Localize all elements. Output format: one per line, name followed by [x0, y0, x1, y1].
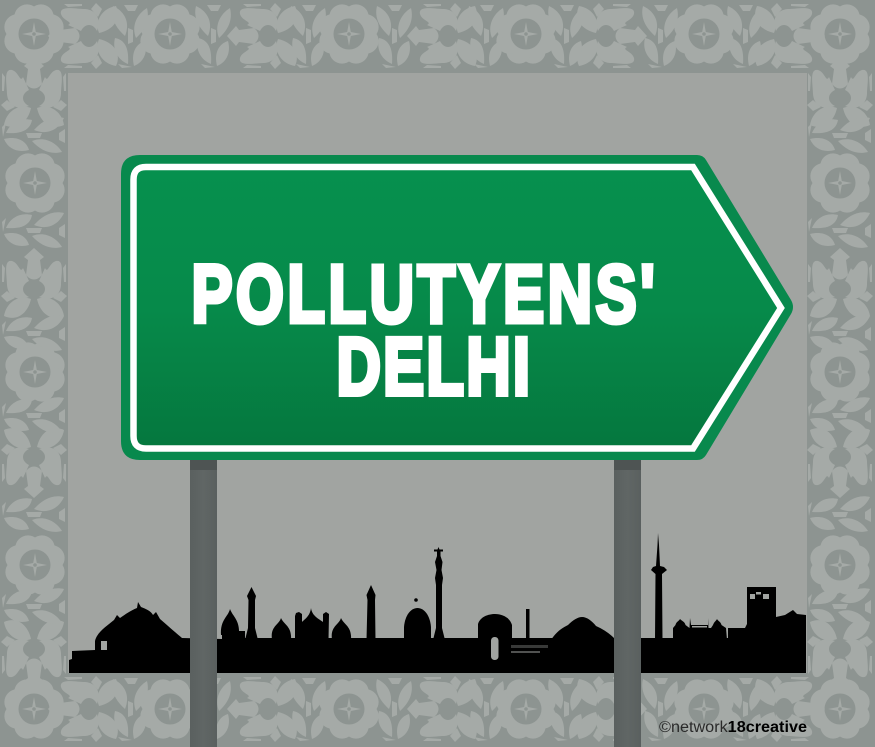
fort wall and tower	[728, 587, 806, 640]
credit watermark: ©network18creative	[659, 719, 807, 736]
left signpost pole	[190, 460, 217, 747]
sign title: POLLUTYENS'	[192, 248, 658, 340]
sign title: DELHI	[336, 321, 532, 413]
right signpost pole	[614, 460, 641, 747]
red fort	[673, 618, 727, 640]
Delhi skyline silhouette	[69, 533, 806, 673]
sign title	[192, 248, 658, 413]
TV tower	[651, 533, 667, 640]
windows and arches cut into the silhouette	[101, 592, 769, 660]
victory column with cross	[433, 547, 445, 640]
obelisk and lattice	[526, 609, 530, 644]
Jama Masjid style mosque	[295, 608, 329, 640]
India Gate	[478, 614, 512, 640]
minarets	[245, 587, 258, 640]
domes	[221, 609, 239, 635]
base band and left temple	[69, 602, 806, 673]
central grey panel	[68, 73, 807, 673]
green arrow road sign	[121, 155, 793, 460]
right dome	[551, 617, 614, 640]
